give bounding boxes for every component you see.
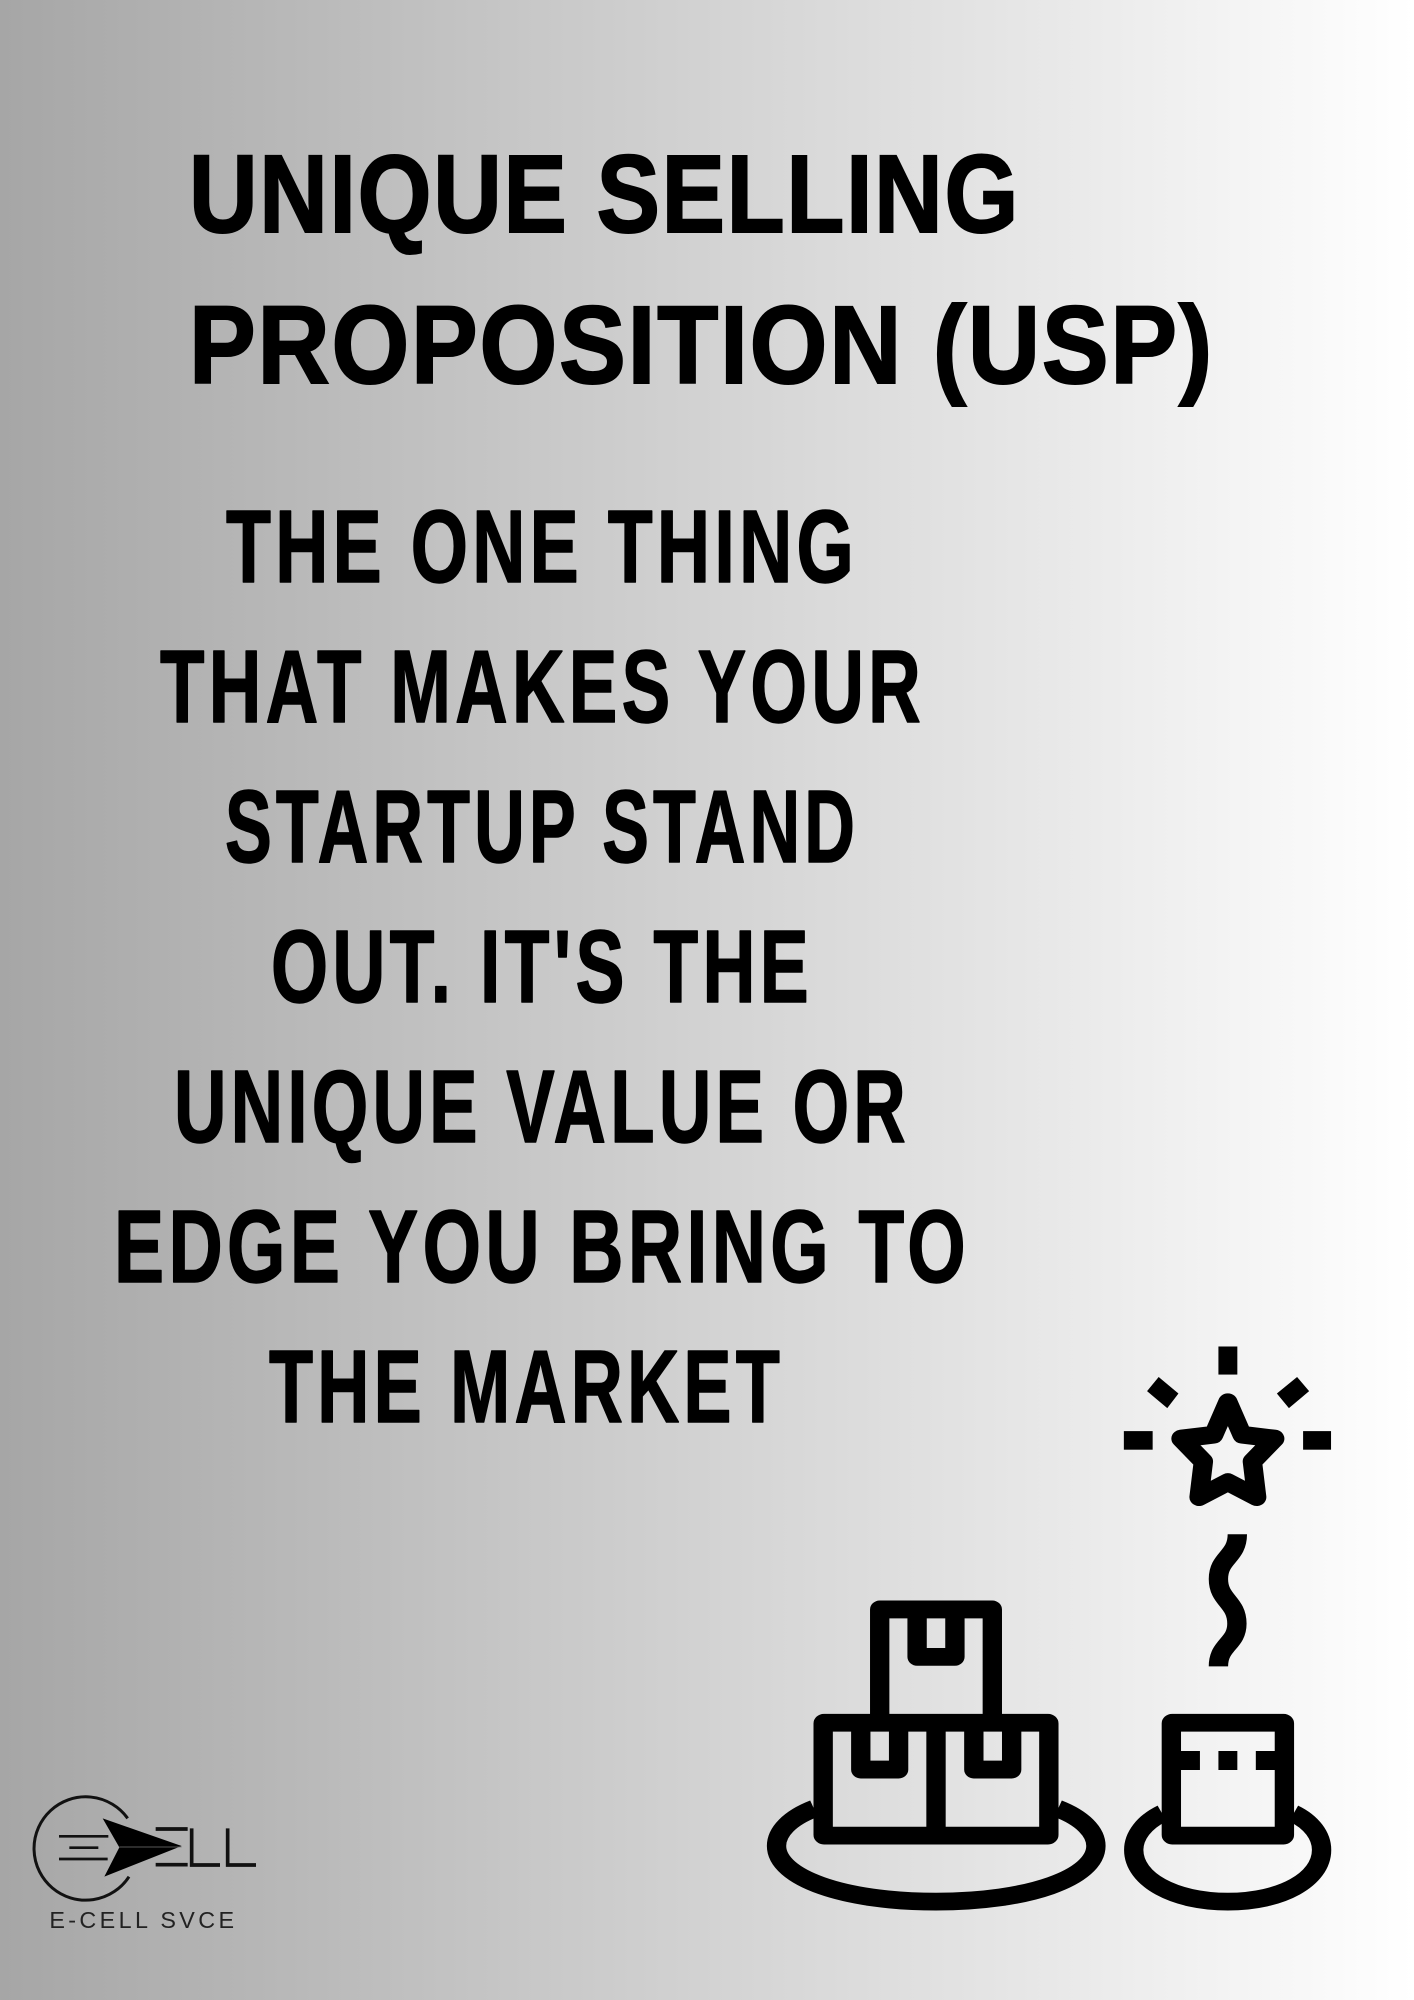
body text: USP definition: UNIQUE VALUE OR: [174, 1049, 910, 1164]
logo speed lines: [59, 1836, 108, 1859]
logo letters: [156, 1828, 256, 1865]
body text: USP definition: THE MARKET: [269, 1329, 784, 1444]
body text: USP definition: [114, 489, 970, 1444]
body text: USP definition: EDGE YOU BRING TO: [114, 1189, 970, 1304]
icon: star rays: [1124, 1346, 1331, 1450]
icon: squiggle line: [1218, 1534, 1237, 1666]
icon: stacked boxes: [823, 1609, 1049, 1836]
logo ring: [34, 1797, 129, 1900]
icon: large platform: [777, 1809, 1096, 1902]
icon: star: [1181, 1402, 1275, 1497]
body text: USP definition: THE ONE THING: [226, 489, 858, 604]
logo: E-Cell SVCE: [32, 1795, 256, 1933]
icon: single box: [1171, 1723, 1284, 1836]
logo caption: E-CELL SVCE: [49, 1907, 234, 1933]
title: [189, 133, 1214, 407]
title: UNIQUE SELLING: [189, 133, 1020, 256]
logo arrow: [103, 1818, 182, 1877]
body text: USP definition: STARTUP STAND: [225, 769, 859, 884]
icon: small platform: [1134, 1813, 1322, 1902]
icon: boxes and a standout star product: [766, 1346, 1332, 1910]
title: PROPOSITION (USP): [189, 284, 1214, 407]
body text: USP definition: THAT MAKES YOUR: [160, 629, 925, 744]
body text: USP definition: OUT. IT'S THE: [271, 909, 813, 1024]
